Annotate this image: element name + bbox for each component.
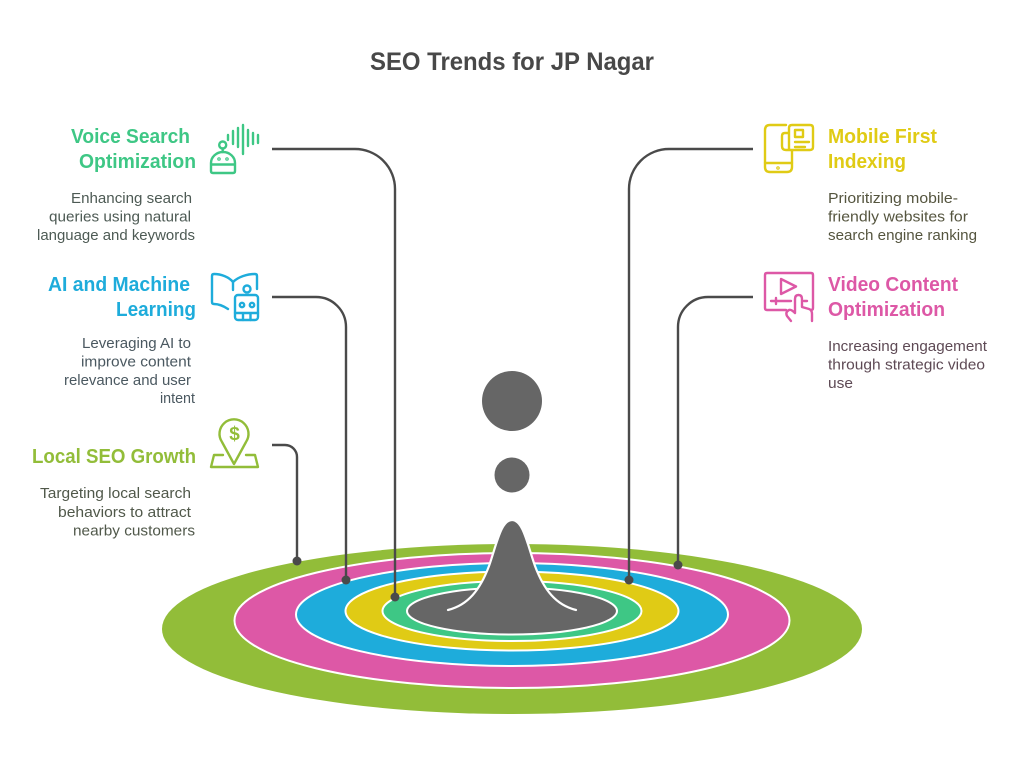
connector: AI and machine learning [272,297,350,584]
mobile heading [828,126,937,173]
voice search description: Enhancing search [71,191,192,207]
title: SEO Trends for JP Nagar [370,48,654,76]
voice search heading: Optimization [79,151,196,173]
AI description: improve content [81,354,191,370]
AI description: Leveraging AI to [82,336,191,352]
water splash peak [448,520,576,610]
mobile heading: Mobile First [828,126,937,148]
AI heading [48,274,196,321]
mobile description [828,191,977,244]
voice search heading [71,126,196,173]
connector: mobile first [624,149,753,584]
icon: video touch [765,273,813,321]
icon: voice robot [211,125,258,173]
video description [828,339,987,392]
local SEO description: behaviors to attract [58,505,191,521]
local SEO heading: Local SEO Growth [32,446,196,468]
voice search description [37,191,195,244]
icon: map pin dollar [211,419,258,467]
AI description: relevance and user [64,373,191,389]
voice search description: queries using natural [49,210,191,226]
AI description [64,336,195,407]
mobile heading: Indexing [828,151,906,173]
local SEO description: nearby customers [73,524,195,540]
concentric ripple rings [162,544,862,714]
video description: Increasing engagement [828,339,987,355]
icon: phone and document [765,125,813,172]
droplet large [482,371,542,431]
local SEO description: Targeting local search [40,486,191,502]
mobile description: search engine ranking [828,228,977,244]
AI description: intent [160,391,195,407]
panel: local SEO growth [32,419,258,540]
voice search heading: Voice Search [71,126,190,148]
video description: use [828,376,853,392]
video heading [828,274,958,321]
AI heading: Learning [116,299,196,321]
voice search description: language and keywords [37,228,195,244]
connector: local SEO [272,445,302,566]
panel: voice search [37,125,258,244]
droplet small [494,458,530,492]
peak outline [448,520,576,610]
video heading: Video Content [828,274,958,296]
icon: map pin dollar: $ [229,424,240,445]
video description: through strategic video [828,358,985,374]
panel: mobile first indexing [765,125,977,244]
mobile description: friendly websites for [828,210,968,226]
connector: video content [674,297,753,570]
panel: video content optimization [765,273,987,392]
local SEO description [40,486,195,540]
panel: AI and machine learning [48,274,258,407]
AI heading: AI and Machine [48,274,190,296]
icon: book robot [212,274,258,320]
mobile description: Prioritizing mobile- [828,191,958,207]
video heading: Optimization [828,299,945,321]
connector: voice search [272,149,400,602]
